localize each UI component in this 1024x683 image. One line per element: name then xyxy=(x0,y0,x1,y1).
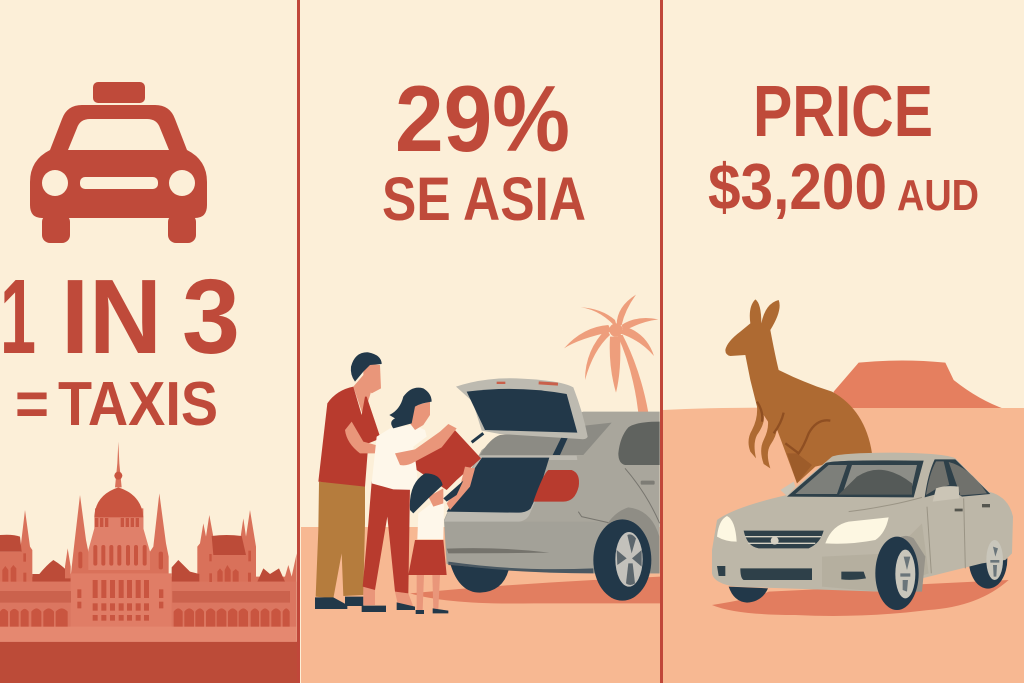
ground: sand xyxy=(301,527,660,683)
divider: right xyxy=(660,0,663,683)
figure: $3,200: $3,200 xyxy=(708,150,887,223)
panel: SE Asia xyxy=(301,66,660,683)
icon: red suitcase xyxy=(395,424,483,490)
label: AUD: AUD xyxy=(897,171,979,220)
panel: price xyxy=(663,72,1024,683)
figure: daughter xyxy=(408,467,475,614)
heading: 1 in 3: 1 xyxy=(0,258,36,376)
heading: 1 in 3: IN xyxy=(61,258,162,376)
icon: kangaroo xyxy=(725,299,872,483)
illustration: parliament skyline xyxy=(0,442,297,683)
panel: taxis xyxy=(0,82,297,683)
subheading: = taxis: TAXIS xyxy=(58,370,218,439)
heading: price: PRICE xyxy=(753,72,933,152)
heading: 1 in 3: 3 xyxy=(182,258,240,376)
illustration: kangaroo, outback and car xyxy=(663,299,1024,683)
icon: taxi xyxy=(30,82,207,243)
icon: mesa xyxy=(834,360,1005,409)
heading: 1 in 3 xyxy=(0,258,240,376)
divider: left xyxy=(297,0,300,683)
subheading: = taxis: = xyxy=(15,370,49,439)
icon: silver sedan xyxy=(712,453,1013,610)
icon: palm tree xyxy=(564,295,658,413)
car shadow xyxy=(712,580,1009,616)
subheading: SE Asia: SE ASIA xyxy=(382,165,586,233)
illustration: family loading car xyxy=(315,295,660,614)
heading: 29%: 29% xyxy=(395,66,570,171)
figure: mother xyxy=(362,388,432,612)
ground: outback xyxy=(663,408,1024,683)
figure: father xyxy=(315,352,382,609)
